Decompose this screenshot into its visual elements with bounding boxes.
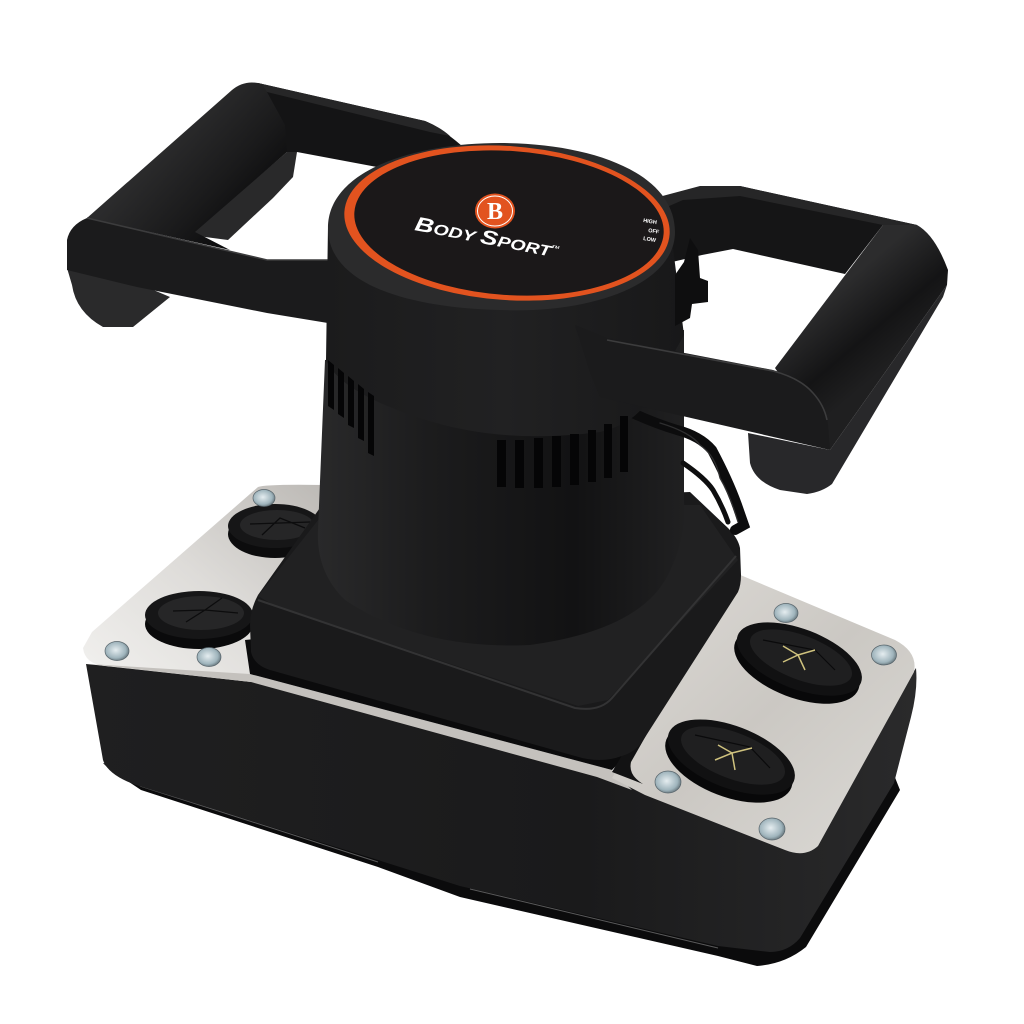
logo badge: B bbox=[487, 199, 503, 225]
back bar of right handle bbox=[655, 186, 917, 274]
screws bbox=[105, 490, 896, 840]
grommet upper right bbox=[724, 607, 872, 719]
motor cylinder bbox=[318, 330, 684, 645]
pad underside rim bbox=[103, 763, 900, 966]
back bar top edge bbox=[258, 83, 450, 136]
left handle grip bbox=[87, 82, 287, 250]
twisted cord bbox=[620, 407, 744, 530]
left handle front bar bbox=[67, 218, 352, 325]
left bar highlight bbox=[87, 218, 347, 260]
base top surface bbox=[258, 505, 738, 706]
lower wall of left handle grip bbox=[190, 152, 297, 240]
back bar of left handle bbox=[258, 83, 462, 172]
rear cord loop bbox=[683, 463, 728, 522]
lower textured lobe of right handle bbox=[748, 285, 947, 494]
pad rim highlight bbox=[140, 786, 718, 948]
switch labels: LOW bbox=[643, 236, 657, 244]
square motor base bbox=[250, 492, 741, 760]
brand name: BODY SPORT bbox=[413, 213, 540, 258]
upper housing bbox=[326, 225, 684, 436]
massage pad bbox=[83, 485, 916, 966]
grommet front left bbox=[145, 591, 253, 649]
left vent slits bbox=[328, 360, 374, 456]
power switch bbox=[675, 238, 708, 326]
right vent slits bbox=[497, 416, 628, 488]
grommet lower right bbox=[654, 704, 805, 818]
switch labels: HIGH bbox=[643, 218, 657, 226]
right steel plate bbox=[612, 574, 915, 853]
grommet back left bbox=[228, 504, 322, 558]
lower lobe of left handle bbox=[67, 268, 170, 327]
orange ring bbox=[339, 135, 675, 311]
right handle front bar bbox=[575, 325, 830, 450]
brand name: TM bbox=[551, 244, 561, 250]
black label disc bbox=[349, 140, 669, 306]
shadow under motor base bbox=[245, 600, 660, 770]
left handle bbox=[67, 82, 462, 327]
right bar highlight bbox=[607, 340, 827, 420]
left steel plate bbox=[83, 485, 325, 682]
back bar top edge bbox=[655, 186, 917, 225]
center steel strip bbox=[90, 664, 632, 790]
notch in right plate bbox=[612, 725, 652, 784]
pad body bbox=[86, 664, 916, 952]
logo badge bbox=[475, 194, 515, 228]
switch labels: OFF bbox=[648, 228, 660, 236]
right handle grip bbox=[775, 225, 948, 450]
power cord bbox=[620, 407, 744, 530]
head collar bbox=[328, 143, 675, 310]
switch labels bbox=[643, 218, 660, 244]
right handle bbox=[655, 186, 948, 494]
base front highlight bbox=[258, 556, 736, 709]
illustration: Body Sport orbital massager bbox=[67, 82, 948, 966]
